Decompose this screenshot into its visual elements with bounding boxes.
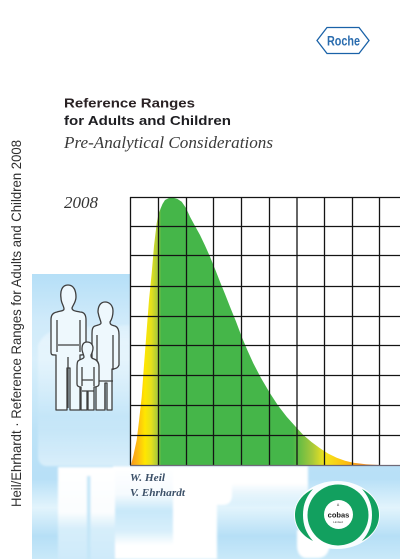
title: Reference Ranges (64, 96, 195, 110)
icon: cobas seal: Limited (333, 520, 343, 524)
adult male figure (51, 285, 86, 410)
authors: V. Ehrhardt (130, 488, 186, 499)
child figure (77, 342, 99, 410)
year: 2008 (64, 193, 98, 212)
skewed distribution curve (131, 198, 400, 465)
authors (130, 473, 186, 499)
subtitle: Pre-Analytical Considerations (63, 133, 273, 152)
authors: W. Heil (130, 473, 165, 484)
icon: cobas seal: A (337, 503, 340, 507)
chart: reference range grid with skewed distribution (130, 197, 400, 466)
icon: family of three outlines (51, 285, 119, 410)
spine text: Heil/Ehrhardt · Reference Ranges for Adults and Children 2008 (8, 140, 24, 507)
icon: Roche logo (317, 28, 369, 54)
panel: blue background with white silhouettes (32, 274, 400, 559)
grid lines (130, 197, 400, 466)
icon: cobas seal (294, 481, 380, 549)
title line 2: for Adults and Children (64, 113, 231, 128)
adult female figure (92, 302, 119, 410)
Roche wordmark: Roche (327, 34, 360, 48)
cobas wordmark: cobas (328, 510, 349, 520)
